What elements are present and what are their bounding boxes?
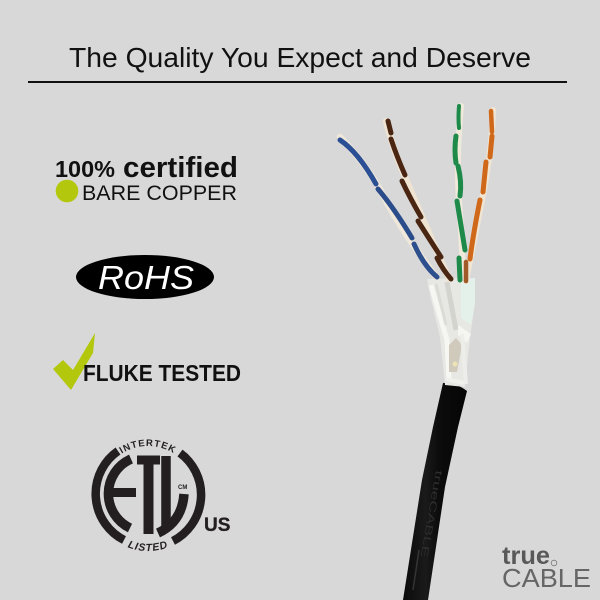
- cable jacket: [403, 383, 467, 600]
- wire pair: brown: [386, 121, 451, 279]
- badge: 100% certified bare copper: [55, 152, 238, 205]
- wire pair: orange: [466, 110, 493, 281]
- badge: 100% certified bare copper: 100%: [55, 156, 115, 182]
- title: The Quality You Expect and Deserve: [69, 42, 531, 73]
- badge: ETL listed: INTERTEK: [118, 439, 176, 454]
- badge: ETL listed: LISTED: [128, 540, 167, 552]
- cable foil shield: [427, 278, 475, 387]
- wire pair: green: [455, 106, 465, 280]
- badge: Fluke tested: FLUKE TESTED: [83, 360, 241, 386]
- badge: ETL listed: CM: [178, 485, 187, 491]
- badge: 100% certified bare copper: certified: [123, 152, 238, 184]
- brand logo: trueCABLE: true: [502, 542, 550, 570]
- cable jacket: trueCABLE: [418, 469, 444, 559]
- brand logo: trueCABLE: [502, 542, 591, 593]
- badge: 100% certified bare copper: BARE COPPER: [82, 182, 237, 205]
- wire pair: blue: [340, 137, 437, 277]
- badge: ETL listed: US: [204, 515, 230, 536]
- brand logo: trueCABLE: CABLE: [502, 565, 591, 593]
- badge: RoHS: RoHS: [98, 259, 194, 296]
- badge: Fluke tested: [53, 333, 241, 390]
- badge: RoHS: [76, 255, 214, 299]
- badge: ETL listed: [91, 439, 230, 552]
